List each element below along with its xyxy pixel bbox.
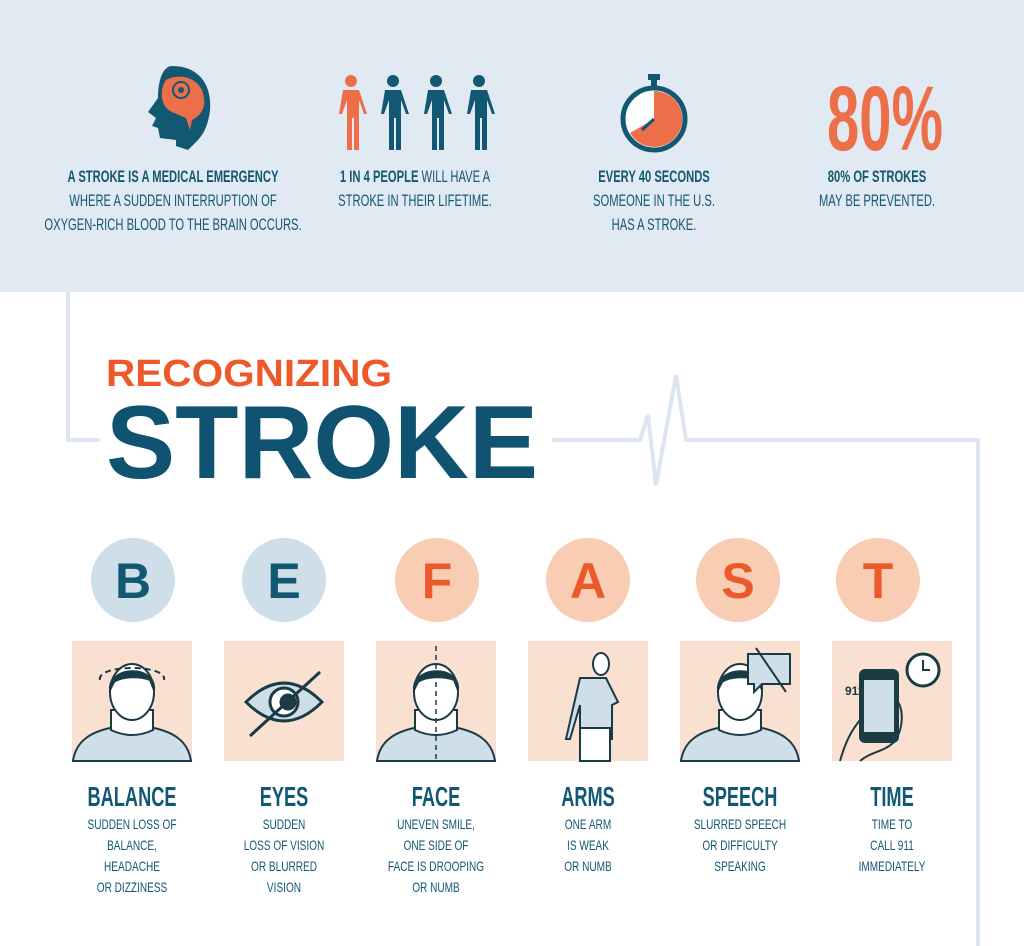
letter circles: E: [267, 553, 301, 609]
title: STROKE: [106, 385, 538, 501]
icon: phone: [840, 654, 939, 761]
descriptions: OR DIZZINESS: [97, 879, 167, 895]
labels: TIME: [870, 782, 914, 813]
labels: [88, 782, 914, 813]
descriptions: HEADACHE: [104, 858, 160, 874]
panels: [72, 641, 952, 761]
stat: 80%: 80%: [827, 68, 943, 170]
descriptions: SLURRED SPEECH: [694, 816, 786, 832]
descriptions: SUDDEN LOSS OF: [88, 816, 176, 832]
descriptions: OR DIFFICULTY: [702, 837, 778, 853]
descriptions: TIME TO: [872, 816, 912, 832]
stat: head: [44, 66, 302, 235]
icon: eye: [246, 672, 322, 736]
stat: 80%: 80% OF STROKES: [828, 168, 927, 187]
letter circles: [91, 538, 920, 622]
descriptions: OR NUMB: [564, 858, 612, 874]
top band: [0, 0, 1024, 292]
letter circles: F: [422, 553, 452, 609]
descriptions: ONE ARM: [565, 816, 611, 832]
descriptions: LOSS OF VISION: [244, 837, 324, 853]
icon: arms: [566, 653, 618, 761]
stat text 2: 1 IN 4 PEOPLE WILL HAVE A: [340, 168, 490, 187]
stat text 3: HAS A STROKE.: [612, 216, 696, 235]
stat text 3: SOMEONE IN THE U.S.: [593, 192, 715, 211]
descriptions: BALANCE,: [107, 837, 157, 853]
labels: EYES: [260, 782, 308, 813]
stat text 1: OXYGEN-RICH BLOOD TO THE BRAIN OCCURS.: [44, 216, 302, 235]
letter circles: A: [570, 553, 606, 609]
labels: ARMS: [561, 782, 615, 813]
descriptions: CALL 911: [870, 837, 914, 853]
stat: 80%: [819, 68, 943, 211]
descriptions: OR NUMB: [412, 879, 460, 895]
heartbeat line frame: [68, 292, 100, 440]
descriptions: ONE SIDE OF: [404, 837, 468, 853]
descriptions: IMMEDIATELY: [859, 858, 925, 874]
title: RECOGNIZING: [106, 353, 392, 395]
person icons (balance, face, speech): [73, 646, 799, 761]
stat text 1: A STROKE IS A MEDICAL EMERGENCY: [68, 168, 279, 187]
stat: 80%: MAY BE PREVENTED.: [819, 192, 935, 211]
stat: people: [338, 75, 495, 211]
labels: FACE: [412, 782, 460, 813]
descriptions: IS WEAK: [567, 837, 609, 853]
stat text 3: [593, 168, 715, 235]
labels: SPEECH: [703, 782, 777, 813]
descriptions: UNEVEN SMILE,: [397, 816, 475, 832]
descriptions: [88, 816, 925, 895]
descriptions: FACE IS DROOPING: [388, 858, 484, 874]
icon: phone: 911: [845, 684, 865, 698]
stat text 2: STROKE IN THEIR LIFETIME.: [338, 192, 492, 211]
stat text 1: [44, 168, 302, 235]
stat text 3: EVERY 40 SECONDS: [598, 168, 710, 187]
descriptions: SUDDEN: [263, 816, 305, 832]
descriptions: OR BLURRED: [251, 858, 317, 874]
letter circles: S: [721, 553, 755, 609]
descriptions: VISION: [267, 879, 301, 895]
labels: BALANCE: [88, 782, 176, 813]
letter circles: T: [863, 553, 893, 609]
descriptions: SPEAKING: [714, 858, 766, 874]
letter circles: B: [115, 553, 151, 609]
stat text 2: [338, 168, 492, 211]
stat: stopwatch: [593, 74, 715, 235]
stat text 1: WHERE A SUDDEN INTERRUPTION OF: [69, 192, 277, 211]
